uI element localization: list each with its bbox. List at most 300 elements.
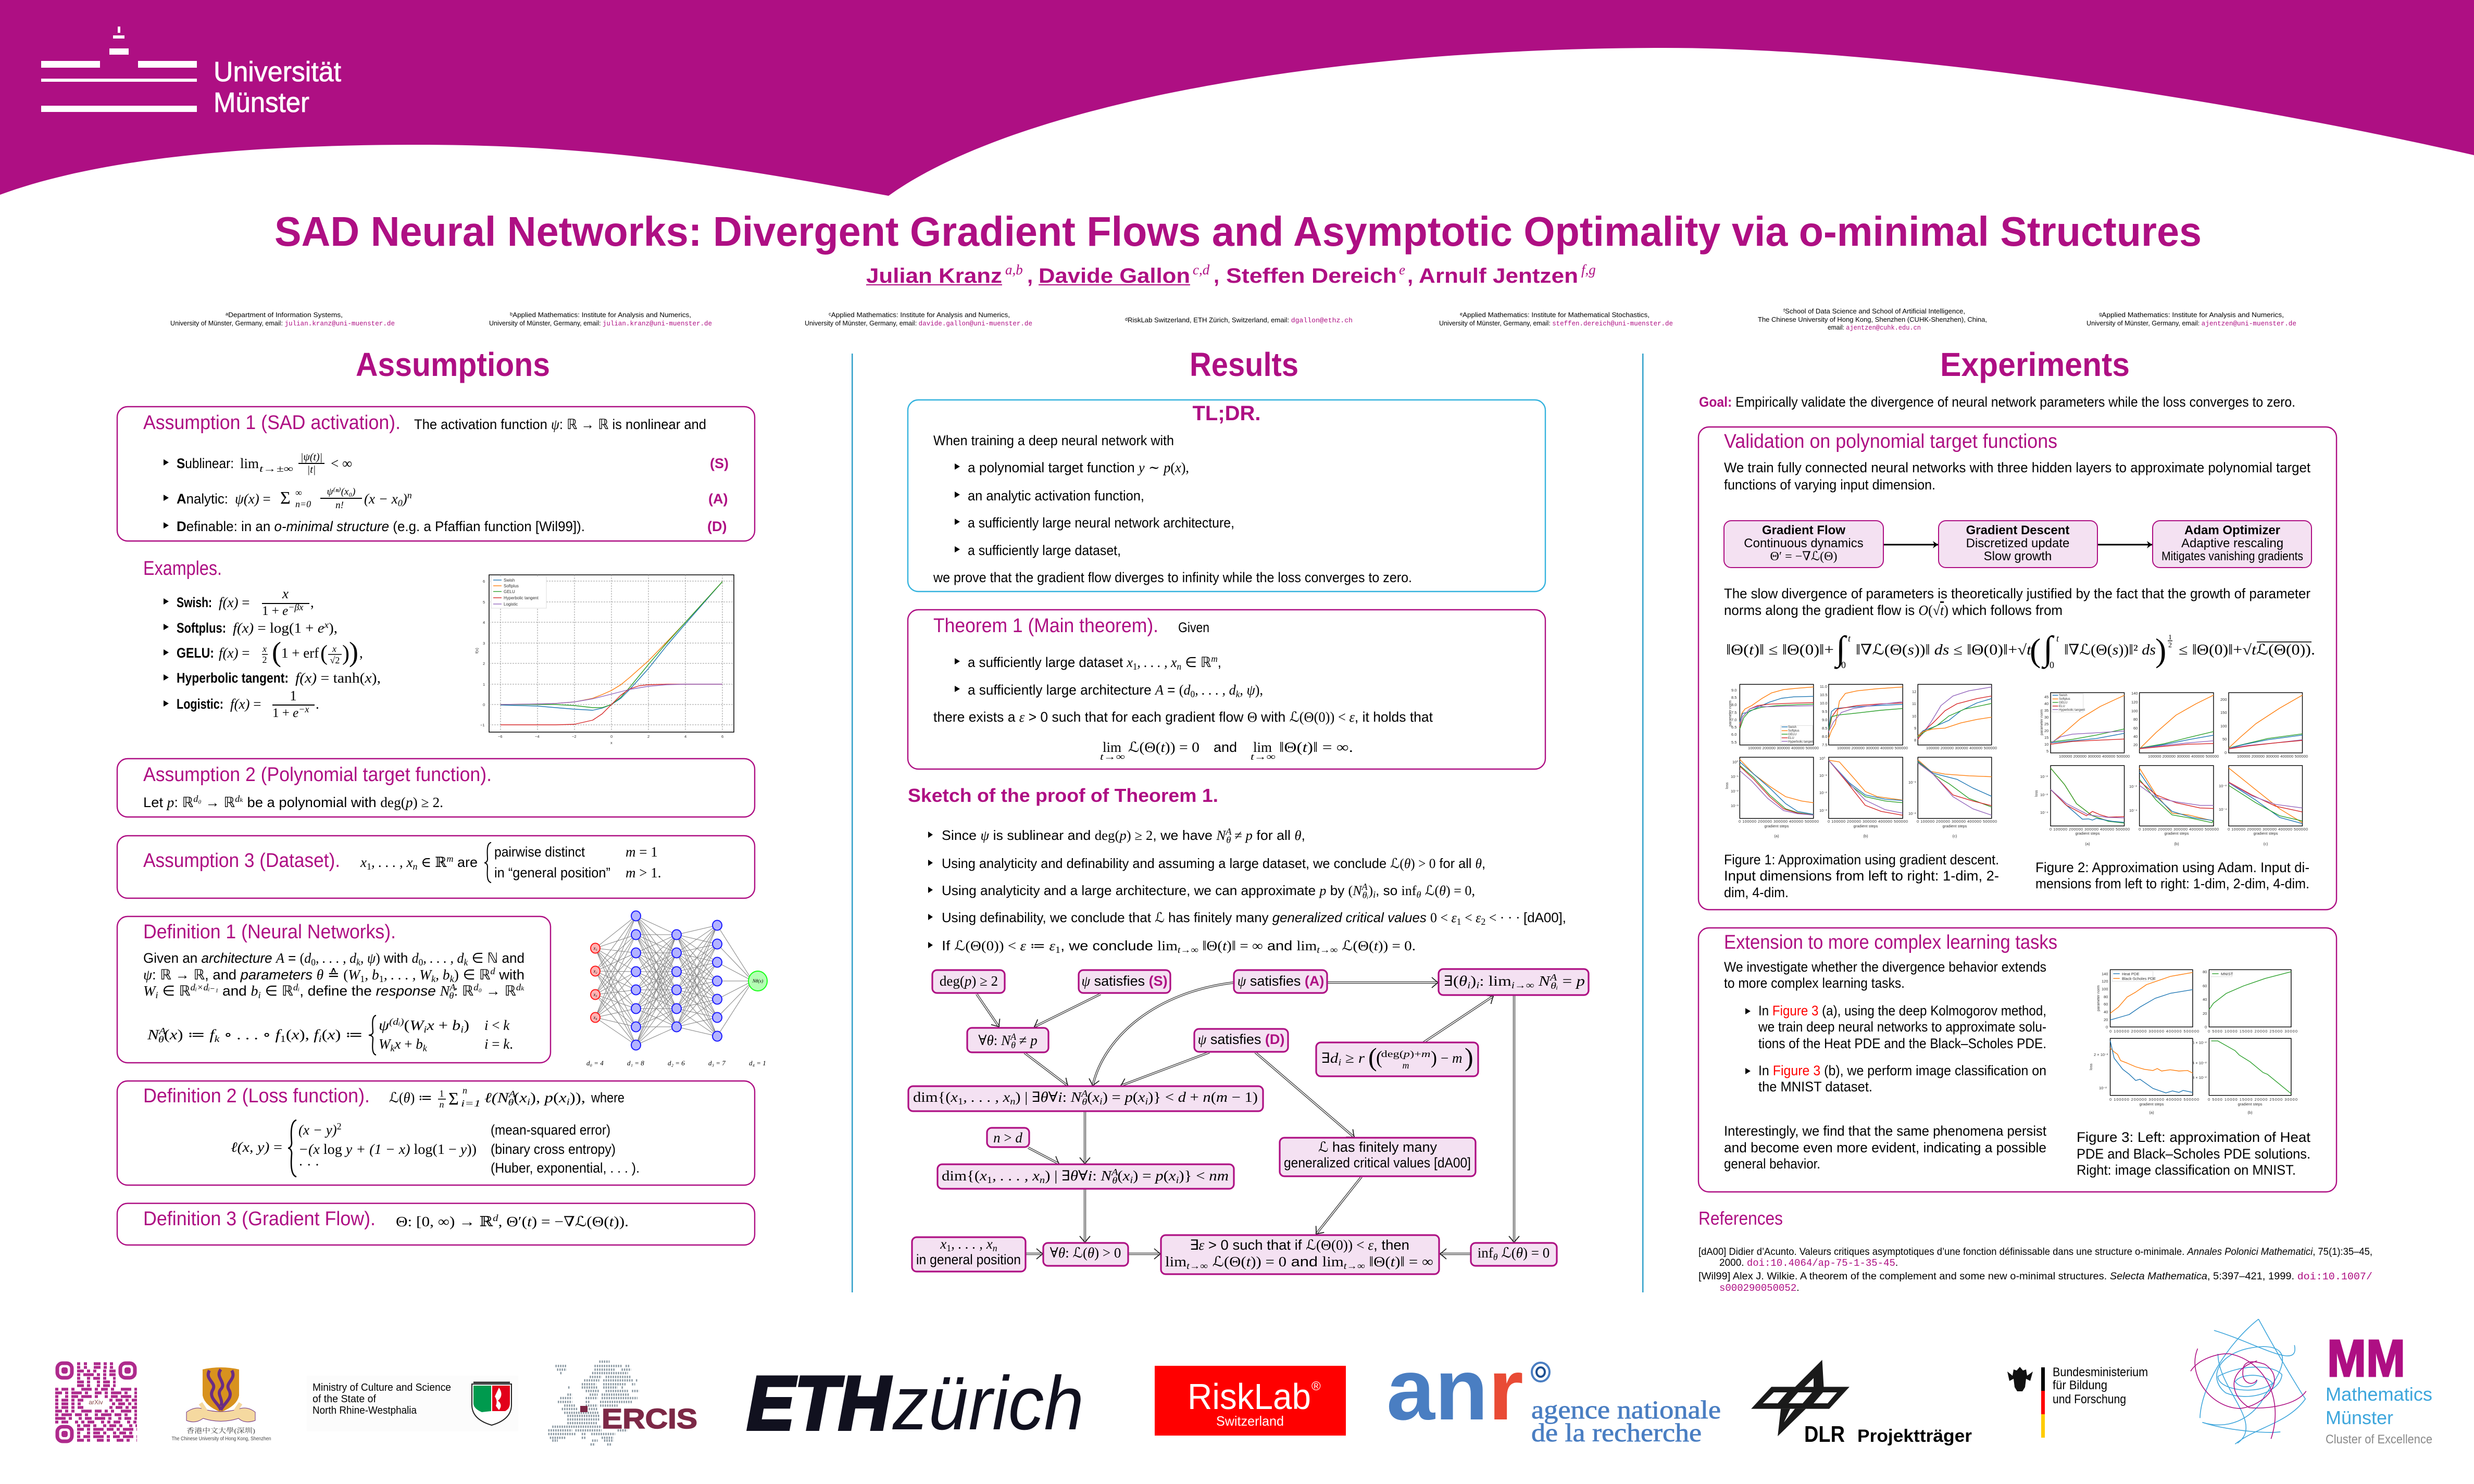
chart labels: figure 3: 6 × 10⁻² bbox=[2192, 1040, 2207, 1045]
diagram: neural network: d₁ = 8 bbox=[627, 1059, 644, 1067]
chart labels: figure 1: 12 bbox=[1912, 689, 1916, 694]
affiliation f bbox=[1758, 307, 1987, 332]
node: exists d_i: ≥ bbox=[1341, 1050, 1358, 1066]
panel: definition 1: k bbox=[423, 1043, 428, 1053]
chart: activation functions: x bbox=[610, 740, 613, 745]
panel: definition 1: k bbox=[450, 974, 455, 984]
references: [Wil99] Alex J. Wilkie. A theorem of the complement and some new o-minimal structures. Selecta Mathematica , 5:397–421, 1999. doi:10.1007/ bbox=[1698, 1271, 2372, 1282]
loss formula: n bbox=[463, 1085, 467, 1096]
equation: norm bound: 0 bbox=[2050, 660, 2054, 670]
panel: TL;DR: a polynomial target function y ∼ p(x), bbox=[968, 460, 1189, 475]
node: dim inequality 1 bbox=[908, 1086, 1263, 1111]
chart labels: figure 3: Heat PDE bbox=[2122, 972, 2139, 976]
figure 2 caption bbox=[2035, 860, 2309, 891]
node: dim inequality 2: θ bbox=[1112, 1175, 1118, 1186]
panel: sketch of proof: < · · · bbox=[1485, 910, 1523, 925]
swish formula: Swish: bbox=[177, 595, 212, 610]
panel: definition 1: f bbox=[276, 1027, 279, 1042]
node: gradient flow: Continuous dynamics bbox=[1744, 536, 1864, 550]
chart labels: figure 3: 3 × 10⁻² bbox=[2192, 1075, 2207, 1080]
swish formula: −βx bbox=[288, 602, 303, 612]
gelu formula: ( bbox=[272, 636, 281, 668]
diagram: proof flow bbox=[908, 969, 1589, 1274]
panel: assumption 1: Definable: in an o-minimal structure (e.g. a Pfaffian function [Wil99]). bbox=[177, 519, 585, 534]
panel: definition 2: −(x log y + (1 − x) log(1 − y)) bbox=[298, 1141, 477, 1157]
panel: assumption 2 bbox=[117, 759, 755, 817]
figure 2 caption: Figure 2: Approximation using Adam. Input di- bbox=[2035, 860, 2309, 875]
loss formula: x bbox=[519, 1090, 526, 1105]
panel: theorem 1: there exists a ε > 0 such that for each gradient flow Θ with ℒ(Θ(0)) < ε, it holds that bbox=[933, 709, 1433, 725]
panel: extension to more complex learning tasks: tions of the Heat PDE and the Black–Scholes PDE. bbox=[1758, 1036, 2046, 1051]
panel: definition 2: 2 bbox=[337, 1121, 342, 1131]
gelu formula: , bbox=[359, 645, 363, 661]
equation: norm bound: ∫ bbox=[1834, 630, 1847, 669]
panel: definition 1: k bbox=[356, 957, 361, 967]
node: exists d_i: deg( p)+ m bbox=[1381, 1049, 1430, 1060]
chart labels: figure 1: 9.5 bbox=[1822, 709, 1827, 714]
chart legend bbox=[491, 576, 546, 608]
logo: NRW ministry: Ministry of Culture and Science bbox=[313, 1382, 451, 1393]
panel: definition 1: ∈ ℝ bbox=[463, 967, 490, 983]
panel: sketch of proof: t→∞ bbox=[1317, 945, 1338, 955]
node: dim inequality 1: )} < bbox=[1148, 1089, 1178, 1105]
chart labels: figure 3: 4 × 10⁻² bbox=[2192, 1061, 2207, 1065]
equation: norm bound: 0 bbox=[1841, 660, 1846, 670]
panel: TL;DR bbox=[908, 400, 1545, 592]
chart labels: figure 2: Swish bbox=[2059, 694, 2067, 697]
logo: RiskLab bbox=[1155, 1366, 1346, 1436]
references: 2000. doi:10.4064/ap-75-1-35-45. bbox=[1719, 1257, 1898, 1269]
panel: sketch of proof: θ bbox=[1416, 889, 1421, 900]
chart labels: figure 1: 10⁻² bbox=[1908, 811, 1916, 816]
heading: experiments: Experiments bbox=[1940, 346, 2130, 383]
panel: assumption 2: deg(p) ≥ 2. bbox=[380, 795, 443, 810]
node: dim inequality 2: i bbox=[1176, 1175, 1179, 1185]
node: n > d bbox=[987, 1128, 1029, 1147]
panel: theorem 1: t→∞ bbox=[1251, 751, 1276, 762]
affiliation b bbox=[489, 311, 712, 328]
figure 1 caption: dim, 4-dim. bbox=[1724, 885, 1789, 900]
chart labels: figure 2: 40 bbox=[2044, 701, 2048, 706]
panel: sketch of proof: (θ) = 0, bbox=[1434, 883, 1475, 898]
panel: assumption 1: ∞ bbox=[295, 487, 302, 498]
panel: assumption 2: dₖ bbox=[235, 794, 243, 804]
chart labels: figure 1: 100000 200000 300000 400000 500000 bbox=[1748, 746, 1819, 750]
chart labels: figure 1: 10⁻³ bbox=[1731, 803, 1739, 808]
panel: theorem 1: , . . . , x bbox=[1137, 655, 1177, 670]
chart labels: figure 1: 7.5 bbox=[1731, 710, 1736, 715]
equation: norm bound: ‖Θ(t)‖ ≤ ‖Θ(0)‖+ bbox=[1726, 642, 1834, 658]
icon: ANR rings bbox=[1532, 1363, 1550, 1381]
softplus formula: ), bbox=[329, 620, 338, 636]
authors: f,g bbox=[1581, 262, 1596, 278]
chart labels: figure 1: parameter norm bbox=[1729, 700, 1732, 726]
affiliation a: University of Münster, Germany, email: julian.kranz@uni-muenster.de bbox=[170, 319, 395, 328]
diagram: neural network: d₀ = 4 bbox=[586, 1059, 604, 1067]
chart labels: figure 2: 10⁻³ bbox=[2040, 793, 2048, 797]
node: network not equal p: ∀θ: N bbox=[978, 1033, 1010, 1048]
icon: spiral bbox=[2191, 1319, 2306, 1444]
chart: activation functions: 3 bbox=[483, 641, 485, 646]
affiliation g: University of Münster, Germany, email: ajentzen@uni-muenster.de bbox=[2086, 319, 2296, 328]
logistic formula: 1 + e bbox=[272, 706, 298, 720]
affiliation f: ᶠSchool of Data Science and School of Artificial Intelligence, bbox=[1783, 307, 1965, 315]
loss formula: ℓ(N bbox=[484, 1090, 504, 1105]
gelu formula: GELU: bbox=[177, 645, 214, 661]
loss formula: A bbox=[508, 1089, 516, 1099]
equation: norm bound: t bbox=[1848, 633, 1851, 644]
affiliations bbox=[170, 307, 2296, 332]
panel: sketch of proof: θ bbox=[1226, 835, 1231, 845]
header banner bbox=[0, 0, 2474, 196]
column: results bbox=[908, 346, 1589, 1274]
node: network not equal p: A bbox=[1010, 1032, 1017, 1042]
panel: definition 1: 1 bbox=[360, 974, 365, 984]
panel: definition 1: x), f bbox=[292, 1027, 318, 1042]
chart: activation functions: −4 bbox=[535, 734, 540, 739]
chart labels: figure 3: (a) bbox=[2149, 1110, 2154, 1115]
panel: assumption 1: ψ(x) = bbox=[235, 491, 271, 507]
icon: DLR lightning bbox=[1751, 1360, 1850, 1436]
node: dim inequality 1: ) | ∃ bbox=[1015, 1089, 1041, 1105]
loss formula: n bbox=[440, 1099, 444, 1110]
panel: assumption 1: Σ bbox=[280, 488, 291, 508]
panel: sketch of proof: , we conclude bbox=[1060, 938, 1157, 953]
diagram: neural network: x₄ bbox=[593, 1015, 597, 1020]
panel: extension to more complex learning tasks: to more complex learning tasks. bbox=[1724, 975, 1905, 991]
affiliation b: ᵇApplied Mathematics: Institute for Analysis and Numerics, bbox=[510, 311, 691, 319]
node: general position bbox=[912, 1236, 1026, 1272]
chart: activation functions: 4 bbox=[483, 620, 485, 625]
panel: validation on polynomial target functions: norms along the gradient flow is O(√t) which follows from bbox=[1724, 602, 2063, 618]
node: dim inequality 1: x bbox=[1092, 1089, 1099, 1105]
node: infimum: inf bbox=[1478, 1245, 1493, 1261]
panel: assumption 1 bbox=[117, 407, 755, 541]
node: infimum bbox=[1471, 1243, 1557, 1266]
gelu formula: x bbox=[332, 644, 336, 654]
panel: definition 3: d bbox=[493, 1213, 499, 1223]
panel: assumption 1: n=0 bbox=[295, 499, 311, 509]
node: dim inequality 1: dim{( x bbox=[913, 1089, 957, 1105]
panel: assumption 1: Assumption 1 (SAD activation). bbox=[143, 412, 401, 434]
chart labels: figure 1 bbox=[1726, 684, 1997, 838]
logo: NRW ministry: North Rhine-Westphalia bbox=[313, 1405, 417, 1416]
node: loss positive: ∀θ: ℒ(θ) > 0 bbox=[1050, 1245, 1121, 1261]
gelu formula: √2 bbox=[330, 655, 340, 665]
panel: sketch of proof: Using definability, we conclude that ℒ has finitely many generalized critical values 0 < ε bbox=[942, 910, 1457, 925]
panel: theorem 1: ∈ ℝ bbox=[1181, 655, 1211, 670]
chart labels: figure 1: 9 bbox=[1914, 726, 1916, 731]
loss formula: ℒ(θ) ≔ bbox=[389, 1090, 432, 1105]
heading: assumptions: Assumptions bbox=[356, 346, 550, 383]
panel: definition 1: 1 bbox=[280, 1034, 286, 1044]
panel: assumption 1: Analytic: bbox=[177, 491, 228, 507]
chart labels: figure 1: 10⁻¹ bbox=[1908, 780, 1916, 785]
panel: definition 1: N bbox=[147, 1027, 157, 1042]
node: deg(p): deg(p) ≥ 2 bbox=[940, 973, 998, 989]
chart labels: figure 2: 25 bbox=[2044, 722, 2048, 726]
swish formula: , bbox=[310, 595, 314, 610]
softplus formula: f(x) = log(1 + e bbox=[233, 620, 324, 636]
panel: assumption 1: (x − x bbox=[364, 491, 398, 507]
node: dim inequality 2: dim{( x bbox=[942, 1168, 986, 1184]
logo wordmark: Münster bbox=[214, 87, 309, 118]
node: dim inequality 2: θ∀i: N bbox=[1070, 1168, 1110, 1184]
node: general position: , . . . , x bbox=[951, 1236, 993, 1252]
panel: sketch of proof: ) bbox=[1368, 883, 1373, 898]
loss formula: p(x bbox=[545, 1090, 565, 1105]
panel: theorem 1: Given bbox=[1178, 620, 1209, 635]
panel: definition 1: i bbox=[460, 1024, 464, 1035]
node: dim inequality 1: θ∀i: N bbox=[1041, 1089, 1080, 1105]
node: main conclusion: (Θ(t)) = 0 and lim bbox=[1224, 1254, 1341, 1269]
chart labels: figure 2: 45 bbox=[2044, 695, 2048, 699]
chart labels: figure 3: 10⁻² bbox=[2099, 1086, 2107, 1090]
panel: validation on polynomial target functions bbox=[1698, 427, 2336, 910]
logo: ANR: an bbox=[1386, 1341, 1488, 1438]
panel: assumption 3 bbox=[117, 836, 755, 898]
node: general position: x bbox=[940, 1236, 946, 1252]
panel: definition 1: response N bbox=[376, 983, 449, 999]
chart labels: figure 2: loss bbox=[2035, 790, 2039, 797]
chart labels: figure 1: gradient steps bbox=[1764, 824, 1789, 828]
affiliation c bbox=[805, 311, 1032, 328]
chart labels: figure 3: 20 bbox=[2104, 1017, 2108, 1022]
chart labels: figure 1: 8 bbox=[1914, 738, 1916, 743]
panel: definition 1: ∈ ℝ bbox=[158, 983, 191, 999]
affiliation f: The Chinese University of Hong Kong, Shenzhen (CUHK-Shenzhen), China, bbox=[1758, 316, 1987, 323]
panel: definition 1: → ℝ bbox=[482, 983, 516, 999]
panel: definition 1: , b bbox=[365, 967, 379, 983]
node: gradient flow: Θ′ = −∇ℒ(Θ) bbox=[1770, 550, 1838, 563]
gelu formula: ) bbox=[349, 636, 358, 668]
chart: activation functions: 1 bbox=[483, 682, 485, 687]
panel: extension to more complex learning tasks: and become even more evident, indicating a possible bbox=[1724, 1140, 2046, 1155]
logo: BMBF bbox=[2007, 1365, 2148, 1438]
chart legend: Swish bbox=[504, 578, 515, 583]
chart labels: figure 1: 10⁻³ bbox=[1819, 808, 1827, 813]
equation: norm bound: 2 bbox=[2168, 642, 2172, 649]
chart legend: GELU bbox=[504, 589, 515, 594]
panel: assumption 2: d₀ bbox=[193, 794, 202, 804]
panel: assumption 3: 1 bbox=[367, 861, 371, 872]
chart axes and curves: figure 2 bbox=[2051, 693, 2303, 826]
chart labels: figure 2: ELU bbox=[2059, 705, 2065, 708]
authors: c,d bbox=[1193, 262, 1210, 278]
node: network not equal p: p bbox=[1029, 1033, 1038, 1048]
chart labels: figure 2: gradient steps bbox=[2253, 831, 2278, 836]
loss formula: where bbox=[591, 1090, 624, 1105]
node: main conclusion: lim bbox=[1165, 1254, 1186, 1269]
node: gradient descent: Discretized update bbox=[1966, 536, 2069, 550]
authors: Julian Kranz bbox=[866, 265, 1002, 287]
figure 3 caption: Right: image classification on MNIST. bbox=[2077, 1162, 2296, 1178]
node: general position: n bbox=[993, 1243, 997, 1253]
logo: Mathematics Muenster: Münster bbox=[2326, 1407, 2393, 1428]
logo: RiskLab: ® bbox=[1311, 1379, 1321, 1393]
softplus formula: x bbox=[323, 620, 329, 630]
node: exists theta sequence: i bbox=[1476, 980, 1479, 990]
chart labels: figure 2: 20 bbox=[2133, 743, 2138, 747]
panel: definition 1: x) ≔ bbox=[328, 1027, 358, 1042]
gelu formula: 2 bbox=[263, 655, 267, 665]
panel: definition 1: x bbox=[426, 1017, 439, 1033]
logistic formula: −x bbox=[298, 704, 309, 714]
node: dim inequality 1: ) = bbox=[1103, 1089, 1124, 1105]
panel: definition 1: W bbox=[409, 1017, 421, 1033]
panel: assumption 3: m = 1 bbox=[626, 844, 658, 860]
node: dim inequality 2: )} < bbox=[1179, 1168, 1209, 1184]
chart axes and curves: figure 1 bbox=[1740, 684, 1992, 819]
node: gradient flow: Gradient Flow bbox=[1762, 523, 1845, 537]
chart labels: figure 3: loss bbox=[2090, 1063, 2093, 1070]
node: psi A bbox=[1234, 970, 1327, 993]
panel: assumption 3: m bbox=[446, 853, 453, 864]
chart: activation functions: 4 bbox=[684, 734, 686, 739]
node: dim inequality 1: θ bbox=[1082, 1097, 1087, 1107]
chart labels: figure 3: 60 bbox=[2203, 984, 2207, 988]
panel: definition 1 bbox=[117, 916, 551, 1063]
arrows: proof flow bbox=[977, 983, 1514, 1254]
node: dim inequality 1: , . . . , x bbox=[963, 1089, 1010, 1105]
panel: assumption 3: m > 1. bbox=[626, 865, 661, 881]
panel: assumption 2: Let p: ℝ bbox=[143, 795, 193, 810]
chart labels: figure 3: 140 bbox=[2102, 972, 2108, 976]
loss formula: )), bbox=[570, 1090, 585, 1105]
chart labels: figure 1: 8.0 bbox=[1731, 702, 1736, 707]
panel: sketch of proof: 2 bbox=[1481, 916, 1485, 927]
chart legend: Softplus bbox=[504, 584, 519, 588]
node: network not equal p: θ bbox=[1011, 1040, 1016, 1050]
panel: theorem 1: n bbox=[1177, 661, 1181, 672]
chart labels: figure 2: Softplus bbox=[2059, 698, 2070, 701]
node: main conclusion: ℒ bbox=[1208, 1254, 1224, 1269]
logo: ANR: agence nationale bbox=[1531, 1395, 1721, 1424]
node: gradient descent: Gradient Descent bbox=[1966, 523, 2069, 537]
panel: definition 1: ∈ ℝ bbox=[261, 983, 293, 999]
node: exists d_i bbox=[1316, 1042, 1478, 1076]
panel: extension to more complex learning tasks: we train deep neural networks to approximate solu- bbox=[1758, 1019, 2046, 1035]
diagram: neural network: Nθ(x) bbox=[752, 978, 763, 984]
panel: theorem 1: a sufficiently large dataset x bbox=[968, 655, 1133, 670]
chart labels: figure 1: Swish bbox=[1788, 726, 1796, 729]
node: dim inequality 1: A bbox=[1081, 1088, 1089, 1099]
panel: definition 2: ℓ(x, y) = bbox=[231, 1139, 282, 1155]
figure 3 charts bbox=[2090, 970, 2297, 1115]
chart labels: figure 2: 0 100000 200000 300000 400000 500000 bbox=[2139, 827, 2219, 832]
equation: norm bound bbox=[1726, 630, 2315, 670]
logo: ANR bbox=[1386, 1341, 1721, 1447]
chart labels: figure 2: 15 bbox=[2044, 735, 2048, 740]
node: exists theta sequence: A bbox=[1550, 972, 1558, 983]
chart labels: figure 2: 140 bbox=[2131, 691, 2138, 696]
panel: sketch of proof: lim bbox=[1157, 938, 1178, 953]
chart labels: figure 1: 0 100000 200000 300000 400000 500000 bbox=[1739, 819, 1819, 824]
chart labels: figure 1: 6.0 bbox=[1731, 732, 1736, 737]
node: adam optimizer: Mitigates vanishing gradients bbox=[2161, 549, 2303, 563]
panel: assumption 1: The activation function ψ: ℝ → ℝ is nonlinear and bbox=[414, 417, 706, 432]
logistic formula: f(x) = bbox=[230, 696, 261, 712]
logo: CUHK Shenzhen bbox=[172, 1367, 271, 1442]
chart: activation functions: −6 bbox=[498, 734, 503, 739]
panel: definition 1: b bbox=[251, 983, 258, 999]
panel: validation on polynomial target functions: Validation on polynomial target functions bbox=[1724, 431, 2057, 452]
panel: definition 1: , ψ bbox=[360, 950, 376, 966]
chart labels: figure 2: 10⁻³ bbox=[2129, 784, 2137, 789]
chart labels: figure 2: gradient steps bbox=[2075, 831, 2100, 836]
chart labels: figure 2: 10⁻⁴ bbox=[2129, 808, 2138, 813]
panel: assumption 1: < ∞ bbox=[331, 456, 352, 471]
node: dim inequality 1: p(x bbox=[1124, 1089, 1144, 1105]
chart labels: figure 2: 10⁻⁴ bbox=[2040, 810, 2048, 815]
chart labels: figure 3: 0 bbox=[2205, 1025, 2207, 1029]
panel: sketch of proof: t)‖ = ∞ and lim bbox=[1222, 938, 1315, 953]
node: exists theta sequence: ) bbox=[1470, 973, 1476, 989]
chart: activation functions: −2 bbox=[572, 734, 577, 739]
hyperbolic tangent formula: Hyperbolic tangent: bbox=[177, 670, 289, 686]
panel: definition 3: Θ: [0, ∞) → ℝ bbox=[396, 1214, 480, 1229]
panel: definition 1: Given an architecture A = (d bbox=[143, 950, 311, 966]
chart: activation functions: 0 bbox=[610, 734, 613, 739]
figure 1 charts bbox=[1726, 684, 1997, 838]
panel: sketch of proof: 1 bbox=[1055, 945, 1060, 955]
goal statement: Goal: Empirically validate the divergence of neural network parameters while the loss converges to zero. bbox=[1699, 394, 2295, 410]
panel: sketch of proof: ℒ bbox=[1421, 883, 1434, 898]
authors: e bbox=[1399, 262, 1405, 278]
panel: definition 2: (binary cross entropy) bbox=[491, 1141, 616, 1157]
logo: DLR Projekttraeger: Projektträger bbox=[1857, 1426, 1972, 1446]
panel: theorem 1: a sufficiently large architecture A = (d bbox=[968, 682, 1191, 698]
node: gradient descent bbox=[1939, 521, 2097, 568]
panel: assumption 1: (A) bbox=[708, 491, 728, 507]
panel: definition 1: i bbox=[155, 990, 158, 1000]
chart: activation functions: 5 bbox=[483, 600, 485, 605]
panel: definition 1: dᵢ bbox=[293, 982, 299, 992]
figure 3 caption: PDE and Black–Scholes PDE solutions. bbox=[2077, 1146, 2310, 1162]
swish formula: 1 + e bbox=[262, 604, 288, 618]
panel: definition 1: k bbox=[464, 957, 468, 967]
figure 2 charts bbox=[2035, 691, 2308, 846]
panel: sketch of proof: p for all θ, bbox=[1246, 827, 1305, 843]
node: deg(p) bbox=[932, 970, 1005, 993]
chart labels: figure 1: 7.0 bbox=[1731, 718, 1736, 722]
loss formula bbox=[389, 1085, 624, 1110]
node: dim inequality 1: n bbox=[1010, 1096, 1015, 1106]
panel: assumption 1: n! bbox=[335, 500, 344, 511]
references: References bbox=[1698, 1208, 1783, 1229]
chart labels: figure 3: 20 bbox=[2203, 1011, 2207, 1016]
panel: definition 1: ψ bbox=[379, 1017, 388, 1033]
panel: sketch of proof: ε bbox=[1476, 910, 1481, 925]
loss formula: i bbox=[527, 1097, 530, 1107]
logo: NRW ministry bbox=[307, 1376, 518, 1431]
logo: ERCIS: ERCIS bbox=[602, 1403, 697, 1435]
panel: definition 1: i = k. bbox=[484, 1036, 513, 1052]
node: psi D bbox=[1194, 1029, 1288, 1052]
node: psi S: ψ satisfies (S) bbox=[1081, 973, 1168, 989]
panel: extension to more complex learning tasks: Interestingly, we find that the same phenomena persist bbox=[1724, 1123, 2046, 1139]
heading: results: Results bbox=[1190, 346, 1298, 383]
panel: definition 2 bbox=[117, 1081, 755, 1185]
affiliation a bbox=[170, 311, 395, 328]
logo: Mathematics Muenster: Mathematics bbox=[2326, 1384, 2432, 1405]
loss formula: i bbox=[567, 1097, 570, 1107]
logo: ERCIS bbox=[548, 1362, 697, 1444]
authors: Davide Gallon bbox=[1039, 265, 1190, 287]
logo: RiskLab: Switzerland bbox=[1216, 1413, 1284, 1429]
panel: theorem 1: 1 bbox=[1133, 661, 1137, 672]
chart labels: figure 2: 30 bbox=[2044, 715, 2048, 720]
